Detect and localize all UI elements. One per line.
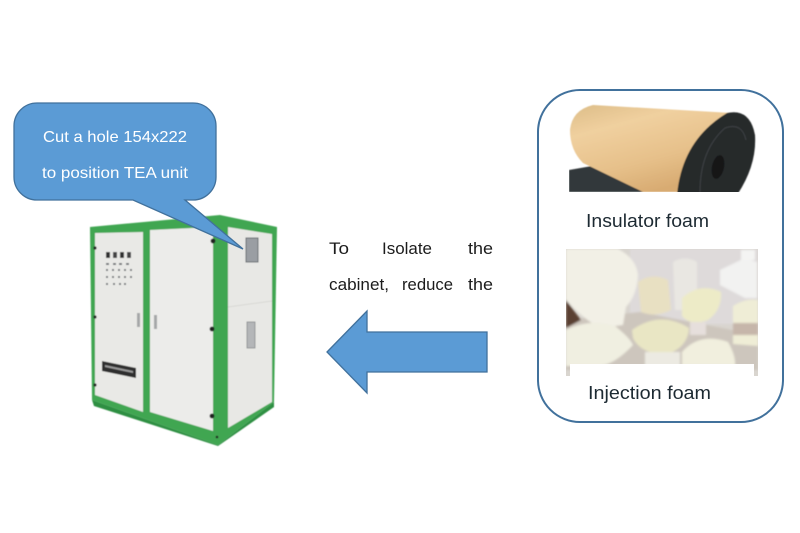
control panel indicators <box>106 252 132 285</box>
nameplate <box>102 361 136 378</box>
right door <box>150 227 213 431</box>
text: isolate the cabinet: the <box>468 240 493 258</box>
text: isolate the cabinet: reduce <box>402 276 453 294</box>
text: isolate the cabinet: Isolate <box>382 240 432 258</box>
infographic canvas <box>13 89 784 447</box>
photo: insulator foam roll <box>569 105 755 195</box>
callout text: to position TEA unit <box>42 165 189 182</box>
cabinet frame <box>90 215 277 445</box>
cabinet base <box>92 400 274 446</box>
text: isolate the cabinet: the <box>468 276 493 294</box>
side panel <box>228 227 272 428</box>
text: isolate the cabinet: cabinet, <box>329 276 389 294</box>
hinges and bolts <box>93 239 218 438</box>
door handles <box>137 313 140 327</box>
lower vent <box>247 322 255 348</box>
photo: injection foam <box>566 249 758 376</box>
upper vent: TEA unit position <box>246 238 258 262</box>
left door <box>95 232 143 412</box>
panel: foam materials <box>538 90 783 422</box>
cabinet machine <box>90 215 277 446</box>
label: injection foam: Injection foam <box>588 383 711 403</box>
callout: cut a hole <box>14 103 243 249</box>
callout text: Cut a hole 154x222 <box>43 129 187 146</box>
arrow pointing left <box>327 311 487 393</box>
text: isolate the cabinet: To <box>329 240 349 258</box>
text: isolate the cabinet <box>329 240 493 294</box>
label: insulator foam: Insulator foam <box>586 211 709 231</box>
callout text <box>42 129 189 182</box>
